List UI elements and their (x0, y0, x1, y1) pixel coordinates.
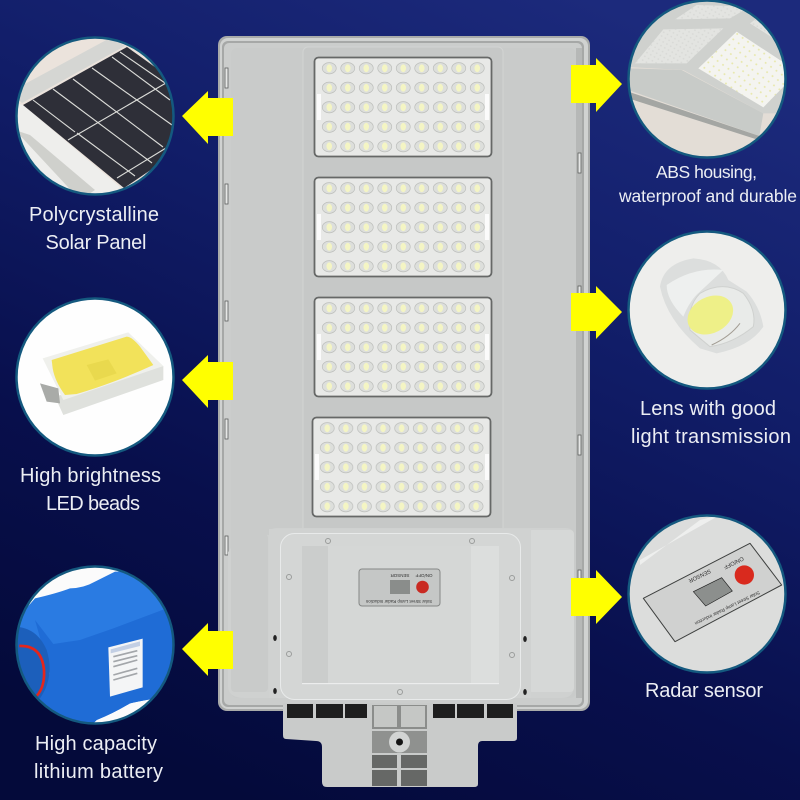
radar sensor plate on lamp: SENSOR (390, 573, 410, 578)
panel: lens (628, 232, 791, 448)
icon: lens circle (628, 232, 786, 388)
caption: Solar Panel (46, 232, 146, 254)
icon: battery circle (15, 565, 175, 725)
panel: ABS housing (618, 0, 797, 206)
icon: LED bead circle (16, 298, 174, 456)
icon: housing circle (627, 0, 787, 159)
caption: ABS housing, (656, 162, 757, 182)
LED module 2 (314, 178, 492, 276)
side slots (225, 68, 581, 590)
icon: radar circle (627, 514, 787, 674)
LED module 4 (312, 418, 490, 516)
arrow: ABS housing (571, 58, 622, 112)
panel: lithium battery (10, 560, 180, 783)
arrow: solar panel (182, 91, 233, 144)
icon: solar panel circle (15, 36, 175, 196)
panel: radar sensor (627, 514, 787, 697)
LED module 1 (314, 58, 492, 156)
arrow: LED beads (182, 355, 233, 408)
icon: radar circle: SENSOR (687, 567, 711, 583)
caption: waterproof and durable (618, 186, 797, 206)
caption: Radar sensor (645, 680, 763, 702)
panel: polycrystalline solar panel (15, 36, 175, 249)
icon: radar circle: Solar Street Lamp Radar Induction (694, 590, 761, 626)
arrow: lens (571, 286, 622, 339)
arrow: battery (182, 623, 233, 676)
radar sensor plate on lamp (359, 569, 440, 606)
caption: Polycrystalline (29, 204, 159, 226)
battery housing (228, 528, 574, 700)
lamp body (218, 36, 590, 787)
radar sensor plate on lamp: Solar Street Lamp Radar Induction (365, 599, 432, 604)
LED module 3 (314, 298, 492, 396)
caption: High brightness (20, 465, 161, 487)
panel: LED beads (16, 298, 174, 515)
caption: Lens with good (640, 398, 776, 420)
lamp mounting bracket (283, 703, 517, 787)
icon: radar circle: ON/OFF (722, 555, 744, 570)
arrow: radar sensor (571, 570, 622, 624)
caption: lithium battery (34, 761, 163, 783)
caption: light transmission (631, 426, 791, 448)
caption: High capacity (35, 733, 157, 755)
radar sensor plate on lamp: ON/OFF (415, 573, 432, 578)
central LED column (303, 47, 503, 537)
caption: LED beads (46, 493, 140, 515)
